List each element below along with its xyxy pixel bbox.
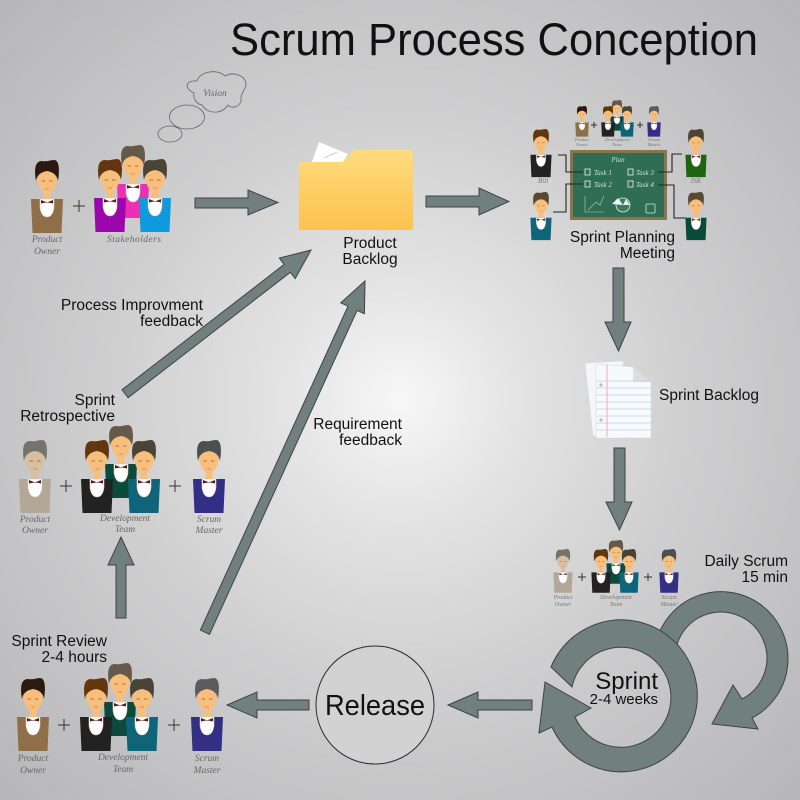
group: sprint retrospective team: Development: [100, 514, 150, 524]
group: sprint review team: Team: [113, 765, 133, 775]
group: sprint review team: Development: [98, 753, 148, 763]
group: sprint planning side members: ISK: [690, 177, 702, 185]
arrow: daily scrum loop: [655, 592, 788, 729]
label: product backlog: Product: [343, 235, 397, 252]
release circle: [316, 646, 434, 764]
group: sprint review team: Scrum: [195, 754, 219, 764]
person: planning member green: [685, 129, 707, 177]
group: sprint planning top team: [574, 100, 661, 147]
group: product owner and stakeholders: [31, 145, 171, 257]
arrow: sprint loop: [539, 620, 697, 772]
label: sprint planning meeting: Sprint Planning: [570, 229, 675, 246]
label: sprint retrospective: Retrospective: [20, 408, 115, 425]
arrow: sprint to release: [448, 692, 532, 718]
label: daily scrum: 15 min: [741, 569, 788, 586]
group: daily scrum team: Master: [660, 602, 678, 608]
release circle: Release: [325, 690, 425, 722]
label: sprint duration: 2-4 weeks: [590, 691, 658, 708]
arrow: release to review: [227, 692, 309, 718]
connector lines: members to tasks: [553, 154, 686, 218]
person: stakeholder blue: [139, 159, 171, 232]
person: stakeholder purple: [94, 159, 126, 232]
group: sprint planning top team: Master: [647, 142, 661, 147]
group: sprint planning top team: Product: [575, 137, 589, 142]
label: process improvement feedback: feedback: [140, 313, 203, 330]
group: sprint planning top team: Owner: [576, 142, 588, 147]
panel: plan chalkboard: Task 3: [636, 169, 654, 177]
group: sprint retrospective team: Master: [195, 526, 223, 536]
label: requirement feedback: Requirement: [313, 416, 402, 433]
panel: plan chalkboard: Task 1: [594, 169, 612, 177]
label: sprint planning meeting: Meeting: [620, 245, 675, 262]
arrow: requirement feedback: [193, 276, 377, 638]
panel: plan chalkboard: Task 4: [636, 181, 654, 189]
label: product owner: Owner: [34, 247, 60, 257]
icon: sprint backlog pages: [585, 361, 651, 438]
label: sprint backlog: Sprint Backlog: [659, 387, 759, 404]
label: requirement feedback: feedback: [339, 432, 402, 449]
title: Scrum Process Conception: [230, 14, 758, 65]
label: sprint duration: Sprint: [595, 668, 658, 695]
label: sprint review: 2-4 hours: [42, 649, 107, 666]
label: stakeholders: Stakeholders: [107, 235, 161, 245]
group: sprint review team: [17, 663, 223, 776]
group: sprint review team: Product: [18, 754, 48, 764]
plus sign: [73, 200, 85, 212]
panel: plan chalkboard: [570, 150, 667, 220]
group: daily scrum team: Scrum: [661, 595, 677, 601]
group: daily scrum team: Team: [610, 602, 623, 608]
group: daily scrum team: Product: [553, 595, 573, 601]
arrow: backlog to planning: [426, 188, 509, 215]
arrow: planning to sprint backlog: [605, 268, 631, 351]
icon: vision thought cloud: [158, 72, 246, 142]
group: sprint planning side members: Bill: [538, 177, 548, 185]
group: sprint retrospective team: Product: [20, 515, 50, 525]
icon: product backlog folder: [299, 142, 413, 230]
person: planning member teal: [530, 192, 552, 240]
group: sprint review team: Owner: [20, 766, 46, 776]
label: daily scrum: Daily Scrum: [704, 553, 788, 570]
group: sprint planning top team: Team: [612, 142, 623, 147]
group: sprint review team: Master: [193, 766, 221, 776]
panel: plan chalkboard: Task 2: [594, 181, 612, 189]
icon: vision thought cloud: Vision: [203, 89, 227, 99]
panel: plan chalkboard: Plan: [610, 156, 625, 164]
group: sprint retrospective team: [19, 425, 225, 536]
person: product owner: [31, 160, 63, 233]
group: sprint retrospective team: Owner: [22, 526, 48, 536]
label: product owner: Product: [32, 235, 62, 245]
label: sprint review: Sprint Review: [11, 633, 107, 650]
label: process improvement feedback: Process Improvment: [61, 297, 203, 314]
person: stakeholder pink: [117, 145, 149, 218]
group: sprint planning top team: Development: [605, 137, 629, 142]
group: daily scrum team: Owner: [555, 602, 572, 608]
group: sprint retrospective team: Team: [115, 525, 135, 535]
person: planning member black: [530, 129, 552, 177]
arrow: stakeholders to backlog: [195, 190, 278, 215]
label: sprint retrospective: Sprint: [74, 392, 115, 409]
arrow: process improvement feedback: [117, 240, 319, 404]
group: daily scrum team: Development: [600, 595, 632, 601]
arrow: sprint backlog to daily team: [606, 448, 632, 530]
group: sprint retrospective team: Scrum: [197, 515, 221, 525]
label: product backlog: Backlog: [342, 251, 398, 268]
group: sprint planning top team: Scrum: [648, 137, 660, 142]
group: daily scrum team: [552, 540, 679, 608]
group: sprint planning side members: [530, 129, 707, 240]
person: planning member dark green: [685, 192, 707, 240]
arrow: review to retrospective: [108, 537, 134, 618]
